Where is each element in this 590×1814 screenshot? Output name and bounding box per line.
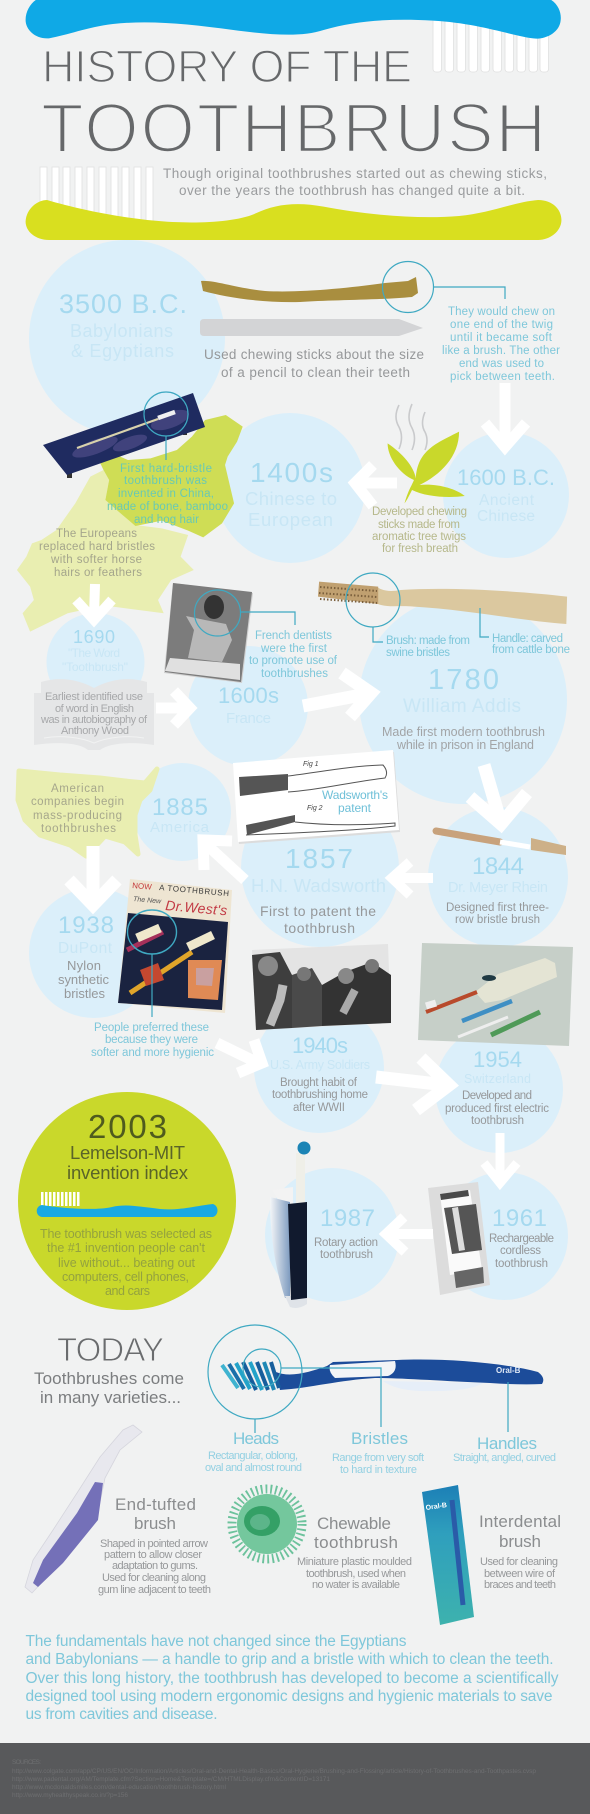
photo: Dr. West's poster: Dr.West's	[165, 897, 228, 918]
text: chewable toothbrush: Miniature plastic moulded	[297, 1556, 412, 1568]
panel: 1938 DuPont: synthetic	[58, 972, 110, 987]
text: end-tufted brush: End-tufted	[115, 1495, 196, 1514]
arrow: 1954 to 1961	[484, 1133, 517, 1183]
photo: Chinese toothbrush chest	[43, 392, 205, 478]
footer: sources: SOURCES:	[12, 1759, 41, 1766]
panel: 3500 B.C.	[29, 240, 560, 436]
label: heads: oval and almost round	[205, 1462, 302, 1474]
text: developed chewing sticks: Developed chewing	[372, 506, 467, 518]
panel: 1938 DuPont: DuPont	[58, 940, 113, 957]
arrow: 1940s to 1954	[376, 1058, 449, 1110]
text: developed chewing sticks: sticks made from	[378, 519, 460, 531]
text: American companies: mass-producing	[33, 810, 122, 822]
labels: brush and handle: Brush: made from	[386, 635, 470, 647]
panel: 1987	[265, 1168, 399, 1302]
photo: Dr. West's poster: NOW	[132, 881, 153, 892]
map: United States	[18, 769, 157, 856]
text: developed chewing sticks	[372, 506, 467, 555]
panel: 1844: row bristle brush	[455, 914, 540, 926]
heading: Today: in many varieties...	[40, 1388, 181, 1407]
callout: people preferred: People preferred these	[94, 1022, 209, 1034]
label: heads	[205, 1429, 302, 1474]
heading: Today: Toothbrushes come	[34, 1369, 184, 1388]
panel: 1690: was in autobiography of	[40, 714, 148, 726]
heading: Today: TODAY	[57, 1331, 164, 1368]
panel: 1954 Switzerland: toothbrush	[471, 1115, 524, 1127]
text: chewable toothbrush: toothbrush	[314, 1533, 398, 1552]
label: bristles: Bristles	[351, 1429, 408, 1448]
label: handles: Straight, angled, curved	[453, 1452, 556, 1464]
panel: 1400s: European	[248, 509, 333, 530]
panel: 1961: cordless	[500, 1245, 541, 1257]
panel: 2003 Lemelson-MIT: Lemelson-MIT	[70, 1142, 185, 1163]
panel: 1600s France: France	[226, 710, 271, 727]
panel: 1780 William Addis	[359, 596, 567, 804]
panel: 3500 B.C.: 3500 B.C.	[59, 289, 187, 319]
panel: 1940s: after WWII	[293, 1102, 345, 1114]
panel: 1938 DuPont: bristles	[64, 986, 106, 1001]
panel: 1600 B.C.: Ancient	[479, 492, 535, 509]
panel: 1987: Rotary action	[314, 1237, 378, 1249]
photo: cordless toothbrush package	[428, 1182, 490, 1295]
text: chewable toothbrush	[297, 1514, 412, 1591]
diagram: modern toothbrush	[208, 1325, 543, 1433]
text: end-tufted brush: adaptation to gums.	[112, 1560, 198, 1572]
arrow: 1690 to 1600s	[156, 691, 190, 725]
text: developed chewing sticks: aromatic tree twigs	[372, 531, 466, 543]
text: interdental brush: Interdental	[479, 1512, 561, 1531]
panel: 1600s France	[188, 646, 308, 766]
text: first hard-bristle: First hard-bristle	[120, 463, 212, 475]
text: American companies	[31, 783, 124, 835]
panel: 1780 William Addis: William Addis	[403, 696, 521, 717]
intro text: Though original toothbrushes started out as chewing sticks,	[163, 166, 547, 181]
closing paragraph: us from cavities and disease.	[26, 1706, 218, 1723]
photo: three-row brush	[436, 831, 566, 855]
text: American companies: companies begin	[31, 796, 124, 808]
text: chewable toothbrush: Chewable	[317, 1514, 391, 1533]
panel: 3500 B.C.: end was used to	[459, 358, 544, 370]
arrow: Europe to 1690	[76, 584, 112, 620]
panel: 1961	[440, 1172, 568, 1300]
panel: 1940s: toothbrushing home	[272, 1089, 368, 1101]
footer: sources: http://www.padental.org/AM/Template.cfm?Section=Home&Template=/CM/HTMLDisplay.cfm&ContentID=13171	[12, 1776, 330, 1783]
panel: 3500 B.C.: & Egyptians	[71, 341, 174, 361]
arrow: 3500 B.C. to 1600 B.C.	[485, 383, 526, 447]
closing paragraph: The fundamentals have not changed since the Egyptians	[26, 1633, 407, 1650]
text: Europeans replaced bristles: The Europeans	[56, 528, 137, 540]
photo: Addis bone toothbrush	[318, 573, 567, 642]
arrow: 1857 to 1885	[203, 840, 245, 880]
photo: Wadsworth patent card: Fig 1	[303, 761, 319, 768]
panel: 1987: toothbrush	[320, 1249, 373, 1261]
panel: 1940s: U.S. Army Soldiers	[270, 1058, 370, 1072]
icon: steam	[396, 404, 427, 450]
photo: Wadsworth patent card	[233, 750, 400, 844]
panel: 1690: of word in English	[55, 703, 134, 715]
text: first hard-bristle: and hog hair	[134, 514, 199, 526]
icon: end-tufted brush	[25, 1425, 142, 1593]
panel: 3500 B.C.: of a pencil to clean their teeth	[221, 365, 410, 380]
text: end-tufted brush: pattern to allow closer	[104, 1549, 202, 1561]
panel: 1987: 1987	[320, 1205, 375, 1232]
text: developed chewing sticks: for fresh breath	[382, 543, 458, 555]
text: first hard-bristle: toothbrush was	[124, 475, 207, 487]
panel: 2003 Lemelson-MIT: the #1 invention people can't	[47, 1241, 206, 1255]
callout: French dentists	[240, 612, 338, 680]
arrow: poster to 1940s	[217, 1040, 262, 1073]
label: bristles: Range from very soft	[332, 1452, 424, 1464]
text: interdental brush: Used for cleaning	[480, 1556, 558, 1568]
title	[41, 41, 546, 167]
panel: 1690: Earliest identified use	[45, 691, 143, 703]
text: first hard-bristle: invented in China,	[118, 488, 214, 500]
panel: 1857 H.N. Wadsworth: H.N. Wadsworth	[251, 875, 386, 896]
panel: 1961: 1961	[492, 1205, 547, 1232]
panel: 2003 Lemelson-MIT: invention index	[67, 1162, 189, 1183]
panel: 1954 Switzerland: 1954	[473, 1047, 522, 1072]
intro text	[163, 166, 547, 198]
text: end-tufted brush: Used for cleaning along	[102, 1572, 206, 1584]
panel: 2003 Lemelson-MIT: live without... beating out	[58, 1256, 196, 1270]
labels: brush and handle: from cattle bone	[492, 644, 570, 656]
panel: 1938 DuPont: 1938	[58, 912, 114, 939]
panel: 1885 America	[133, 763, 231, 861]
icon: interdental brush package: Oral-B	[425, 1502, 447, 1512]
title: HISTORY OF THE	[42, 41, 412, 92]
panel: 3500 B.C.: one end of the twig	[450, 319, 553, 331]
panel: 1844: 1844	[472, 853, 524, 880]
icon: chewing stick	[201, 277, 418, 302]
panel: 1961: toothbrush	[495, 1258, 548, 1270]
text: interdental brush: between wire of	[484, 1568, 556, 1580]
panel: 2003 Lemelson-MIT: computers, cell phones,	[62, 1270, 189, 1284]
panel: 1938 DuPont: Nylon	[67, 958, 101, 973]
map: China	[94, 415, 243, 537]
panel: 3500 B.C.: until it became soft	[450, 332, 553, 344]
closing paragraph: designed tool using modern ergonomic designs and hygienic materials to save	[26, 1688, 552, 1705]
labels: brush and handle: swine bristles	[386, 647, 450, 659]
panel: 3500 B.C.: pick between teeth.	[450, 371, 555, 383]
panel: 1690: "The Word	[68, 646, 120, 660]
icon: interdental brush package	[422, 1485, 474, 1625]
panel: 1885 America: 1885	[152, 794, 208, 821]
panel: 1940s	[254, 1003, 384, 1133]
panel: 3500 B.C.: Used chewing sticks about the size	[204, 347, 424, 362]
arrow: 1600s to 1780	[303, 673, 372, 717]
text: Europeans replaced bristles: hairs or feathers	[54, 567, 142, 579]
panel: 1954 Switzerland: Developed and	[462, 1090, 532, 1102]
photo: electric toothbrush	[418, 943, 573, 1046]
text: end-tufted brush: Shaped in pointed arrow	[100, 1538, 208, 1550]
arrow: America map to 1938	[69, 846, 117, 905]
panel: 1961: Rechargeable	[489, 1233, 554, 1245]
callout: French dentists: toothbrushes	[261, 668, 328, 680]
photo: rotary electric toothbrush	[270, 1142, 310, 1308]
callout: people preferred: softer and more hygienic	[91, 1047, 214, 1059]
arrow: 1780 to 1844	[470, 765, 527, 824]
photo: Wadsworth patent card: Fig 2	[307, 805, 323, 812]
panel: 1690	[34, 613, 154, 750]
panel: 2003 Lemelson-MIT: and cars	[105, 1284, 150, 1298]
panel: 1600s France: 1600s	[218, 683, 279, 708]
text: interdental brush: brush	[499, 1532, 541, 1551]
panel: 1600 B.C.: Chinese	[477, 508, 535, 525]
label: Wadsworth's patent: patent	[338, 801, 372, 815]
header: blue toothbrush	[26, 0, 561, 72]
callout: people preferred	[91, 1022, 214, 1059]
icon: pencil silhouette	[200, 319, 423, 336]
footer: sources: http://www.myhealthyspeak.co.in/?p=156	[12, 1792, 128, 1799]
panel: 1600 B.C.	[443, 432, 569, 558]
text: first hard-bristle: made of bone, bamboo	[107, 501, 228, 513]
photo: woman brushing teeth	[164, 583, 253, 683]
label: heads: Rectangular, oblong,	[208, 1450, 298, 1462]
text: Europeans replaced bristles: replaced hard bristles	[39, 541, 155, 553]
arrow: 1961 to 1987	[386, 1217, 433, 1252]
panel: 1857 H.N. Wadsworth: 1857	[285, 843, 353, 874]
callout: people preferred: because they were	[105, 1034, 198, 1046]
text: chewable toothbrush: no water is available	[312, 1579, 400, 1591]
callout: French dentists: French dentists	[255, 630, 332, 642]
heading: Today	[34, 1331, 184, 1407]
panel: 1954 Switzerland: Switzerland	[464, 1072, 531, 1086]
label: Wadsworth's patent: Wadsworth's	[322, 788, 388, 802]
panel: 3500 B.C.: like a brush. The other	[442, 345, 560, 357]
panel: 1938 DuPont	[29, 888, 159, 1018]
photo: Dr. West's poster: The New	[133, 896, 162, 906]
label: bristles: to hard in texture	[340, 1464, 417, 1476]
text: American companies: toothbrushes	[41, 823, 116, 835]
label: bristles	[332, 1429, 424, 1476]
photo: Dr. West's poster: A TOOTHBRUSH	[159, 883, 230, 898]
label: Wadsworth's patent	[322, 788, 388, 815]
icon: chewable toothbrush	[232, 1489, 302, 1559]
closing paragraph: and Babylonians — a handle to grip and a bristle with which to clean the teeth.	[26, 1651, 554, 1668]
closing paragraph: Over this long history, the toothbrush has developed to become a scientifically	[26, 1670, 559, 1687]
icon: tea leaf	[388, 432, 465, 503]
panel: 1400s: 1400s	[250, 457, 333, 488]
panel: 1844	[428, 807, 568, 947]
panel: 3500 B.C.: They would chew on	[448, 306, 555, 318]
panel: 1844: Designed first three-	[446, 902, 549, 914]
header: green toothbrush	[26, 167, 561, 240]
text: interdental brush	[479, 1512, 561, 1591]
panel: 1885 America: America	[150, 819, 210, 836]
panel: 1400s	[215, 413, 365, 563]
arrow: 1600 B.C. to 1400s	[355, 465, 397, 506]
text: American companies: American	[51, 783, 104, 795]
panel: 1844: Dr. Meyer Rhein	[448, 880, 548, 896]
photo: Dr. West's poster	[118, 879, 232, 1017]
panel: 1857 H.N. Wadsworth: toothbrush	[284, 920, 355, 936]
panel: 1400s: Chinese to	[245, 488, 337, 509]
panel: 1954 Switzerland	[435, 1025, 563, 1153]
text: end-tufted brush	[98, 1495, 211, 1596]
title: TOOTHBRUSH	[41, 89, 546, 167]
text: interdental brush: braces and teeth	[484, 1579, 556, 1591]
footer: sources	[0, 1743, 590, 1814]
label: heads: Heads	[233, 1429, 279, 1448]
panel: 1690: 1690	[73, 627, 115, 647]
map: Europe	[17, 470, 194, 632]
text: end-tufted brush: gum line adjacent to teeth	[98, 1584, 211, 1596]
intro text: over the years the toothbrush has changed quite a bit.	[179, 183, 525, 198]
panel: 1600 B.C.: 1600 B.C.	[457, 465, 555, 490]
callout: French dentists: to promote use of	[249, 655, 338, 667]
text: end-tufted brush: brush	[134, 1514, 176, 1533]
panel: 2003 Lemelson-MIT: The toothbrush was selected as	[40, 1227, 212, 1241]
icon: open book	[34, 679, 154, 750]
panel: 1940s: Brought habit of	[280, 1077, 358, 1089]
labels: brush and handle	[386, 633, 570, 659]
panel: 1690: "Toothbrush"	[62, 660, 128, 674]
labels: brush and handle: Handle: carved	[492, 633, 563, 645]
label: handles	[453, 1434, 556, 1464]
text: first hard-bristle	[107, 463, 228, 526]
panel: 1857 H.N. Wadsworth: First to patent the	[260, 903, 376, 919]
panel: 2003 Lemelson-MIT	[18, 1092, 236, 1310]
panel: 2003 Lemelson-MIT: 2003	[88, 1108, 167, 1145]
text: Europeans replaced bristles	[39, 528, 155, 579]
panel: 1690: Anthony Wood	[61, 725, 129, 737]
panel: 3500 B.C.: Babylonians	[70, 321, 173, 341]
closing paragraph	[26, 1633, 559, 1723]
panel: 1857 H.N. Wadsworth	[241, 789, 399, 947]
icon: mini toothbrush	[37, 1192, 218, 1217]
text: chewable toothbrush: toothbrush, used when	[306, 1568, 406, 1580]
arrow: 1844 to 1857	[392, 862, 433, 895]
panel: 1780 William Addis: 1780	[428, 664, 499, 696]
panel: 1940s: 1940s	[292, 1033, 348, 1058]
footer: sources: http://www.mcdonaldsmiles.com/dental-education/toothbrush-history.html	[12, 1784, 227, 1791]
text: Europeans replaced bristles: with softer horse	[50, 554, 142, 566]
footer: sources: http://www.colgate.com/app/CP/US/EN/OC/Information/Articles/Oral-and-Dental-Health-Basics/Oral-Hygiene/Brushing-and-Flossing/article/History-of-Toothbrushes-and-Toothpastes.cvsp	[12, 1768, 536, 1775]
panel: 1780 William Addis: Made first modern toothbrush	[382, 725, 545, 739]
diagram: modern toothbrush: Oral-B	[496, 1366, 521, 1375]
callout: French dentists: were the first	[260, 643, 328, 655]
panel: 1954 Switzerland: produced first electric	[445, 1103, 549, 1115]
label: handles: Handles	[477, 1434, 537, 1453]
photo: soldiers brushing	[252, 944, 391, 1030]
panel: 1780 William Addis: while in prison in England	[396, 738, 534, 752]
